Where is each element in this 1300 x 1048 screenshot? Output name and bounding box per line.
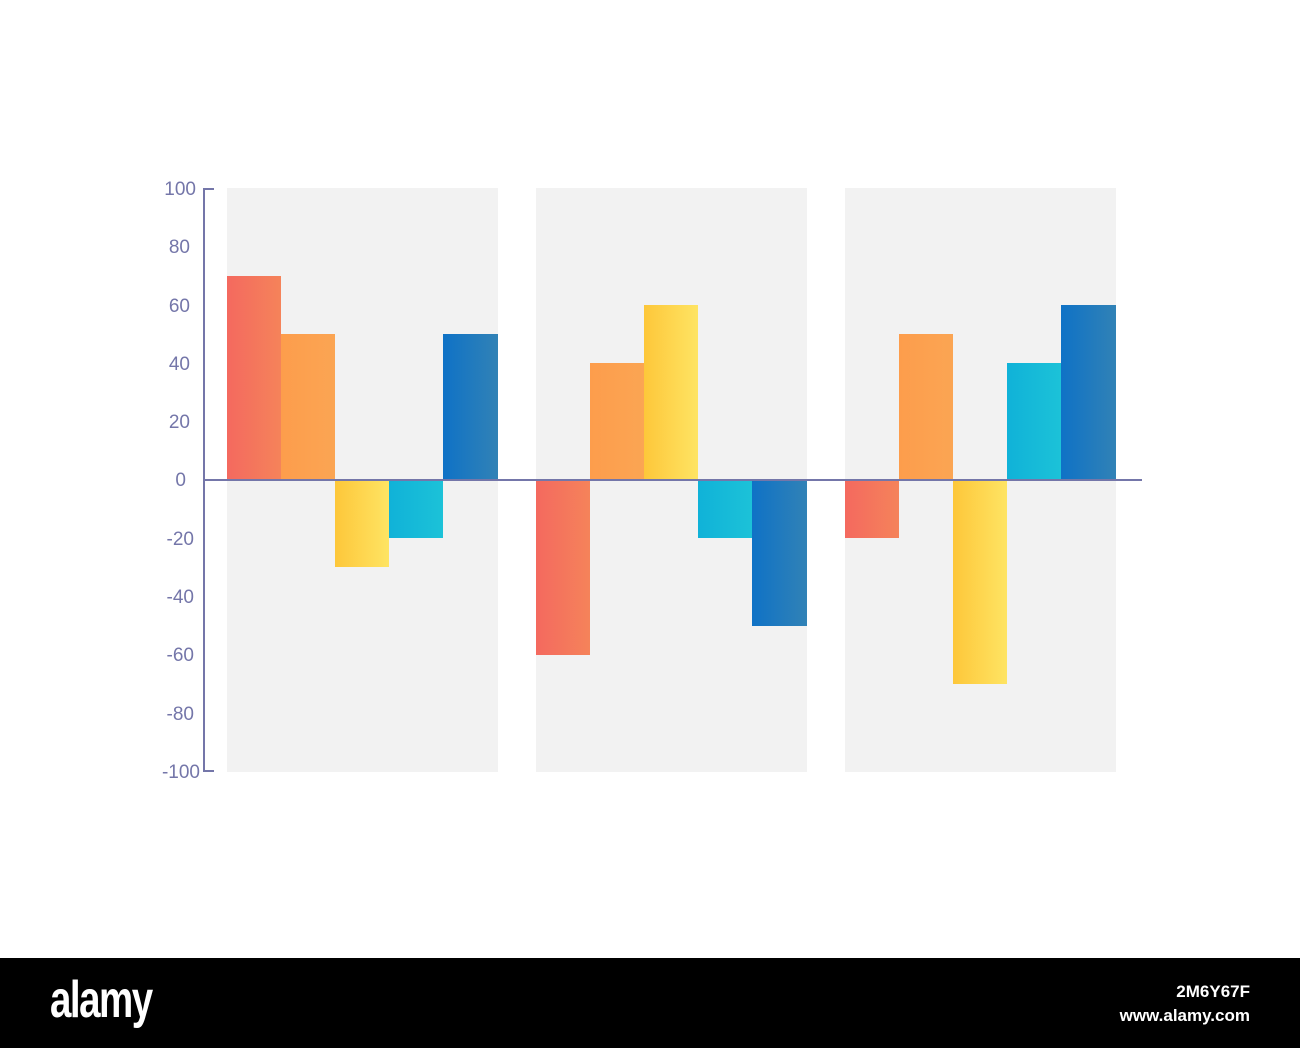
y axis	[204, 188, 1142, 772]
y axis labels: 80	[169, 237, 190, 258]
url: www.alamy.com	[1120, 1006, 1250, 1025]
panel backgrounds	[227, 188, 1116, 772]
y axis labels: -100	[162, 762, 200, 783]
image id: 2M6Y67F	[1176, 982, 1250, 1001]
y axis labels: 60	[169, 296, 190, 317]
bars: group 1	[227, 276, 498, 567]
y axis labels: 20	[169, 412, 190, 433]
y axis labels: 40	[169, 354, 190, 375]
y axis labels: -20	[167, 529, 194, 550]
bars: group 2	[536, 305, 807, 655]
y axis labels: -40	[167, 587, 194, 608]
y axis labels	[162, 179, 200, 783]
y axis labels: -80	[167, 704, 194, 725]
y axis labels: 100	[164, 179, 196, 200]
y axis labels: -60	[167, 645, 194, 666]
logo text: alamy	[50, 971, 152, 1029]
y axis labels: 0	[175, 470, 186, 491]
footer banner	[0, 958, 1300, 1048]
bars: group 3	[845, 305, 1116, 684]
